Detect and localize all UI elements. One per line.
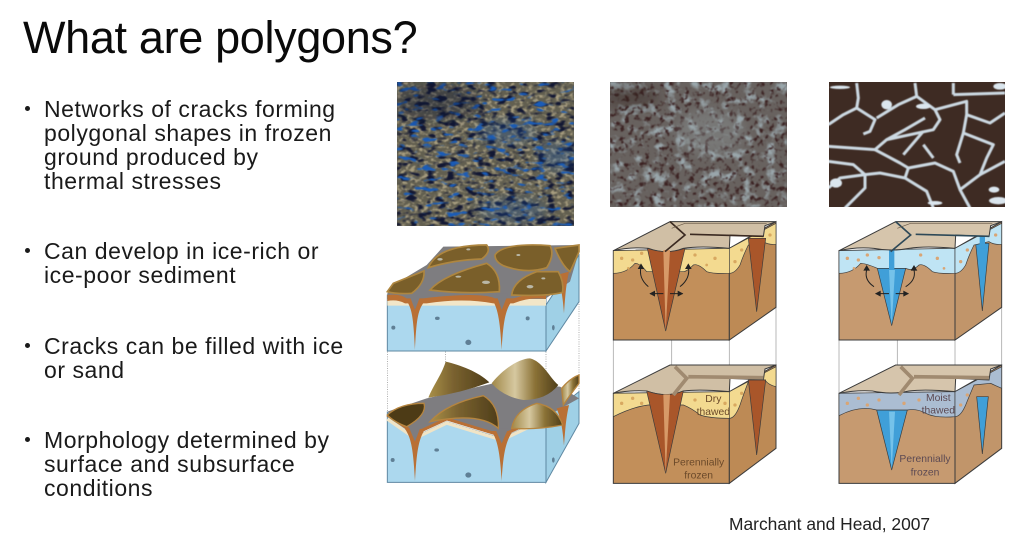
bullet: filled with ice or sand: or sand xyxy=(44,357,125,383)
upper sand wedge block xyxy=(613,222,776,340)
labels: thawed xyxy=(697,407,730,418)
bullet: filled with ice or sand: Cracks can be filled with ice xyxy=(44,333,344,359)
bullet: morphology: surface and subsurface xyxy=(44,451,295,477)
bullet: networks of cracks: polygonal shapes in frozen xyxy=(44,120,332,146)
labels xyxy=(899,393,955,478)
bullet: networks of cracks xyxy=(25,96,336,194)
connector lines xyxy=(839,307,1002,483)
photo: brown polygons with white cracks xyxy=(828,82,1008,208)
diagram: ice wedge blocks xyxy=(839,222,1002,483)
citation: Marchant and Head, 2007 xyxy=(729,514,930,534)
title: What are polygons? xyxy=(23,12,417,63)
bullet: networks of cracks: thermal stresses xyxy=(44,168,222,194)
bullet: ice-rich or ice-poor xyxy=(25,238,319,288)
photo: gray dry polygons xyxy=(600,82,787,207)
bullet: morphology: Morphology determined by xyxy=(44,427,330,453)
lower ice wedge block xyxy=(839,365,1002,483)
diagram: ice-rich polygon blocks xyxy=(387,245,579,482)
upper block xyxy=(387,245,579,351)
bullet: morphology xyxy=(25,427,330,501)
diagram: sand wedge blocks xyxy=(613,222,776,483)
bullet: ice-rich or ice-poor: ice-poor sediment xyxy=(44,262,236,288)
lower block xyxy=(387,358,579,482)
labels: Dry xyxy=(705,394,722,405)
labels: frozen xyxy=(684,471,713,482)
labels: Perennially xyxy=(673,457,725,468)
labels xyxy=(673,394,730,482)
dotted connector lines xyxy=(387,302,579,418)
photo: ice-rich polygons with blue ponds xyxy=(392,82,575,226)
bullet: networks of cracks: ground produced by xyxy=(44,144,258,170)
upper ice wedge block xyxy=(839,222,1002,340)
lower sand wedge block xyxy=(613,365,776,483)
bullet: ice-rich or ice-poor: Can develop in ice-rich or xyxy=(44,238,319,264)
labels: thawed xyxy=(922,406,955,417)
connector lines xyxy=(613,307,776,483)
bullet: networks of cracks: Networks of cracks forming xyxy=(44,96,336,122)
labels: Perennially xyxy=(899,454,951,465)
bullet: morphology: conditions xyxy=(44,475,153,501)
labels: Moist xyxy=(926,393,951,404)
bullet: filled with ice or sand xyxy=(25,333,344,383)
labels: frozen xyxy=(911,467,940,478)
